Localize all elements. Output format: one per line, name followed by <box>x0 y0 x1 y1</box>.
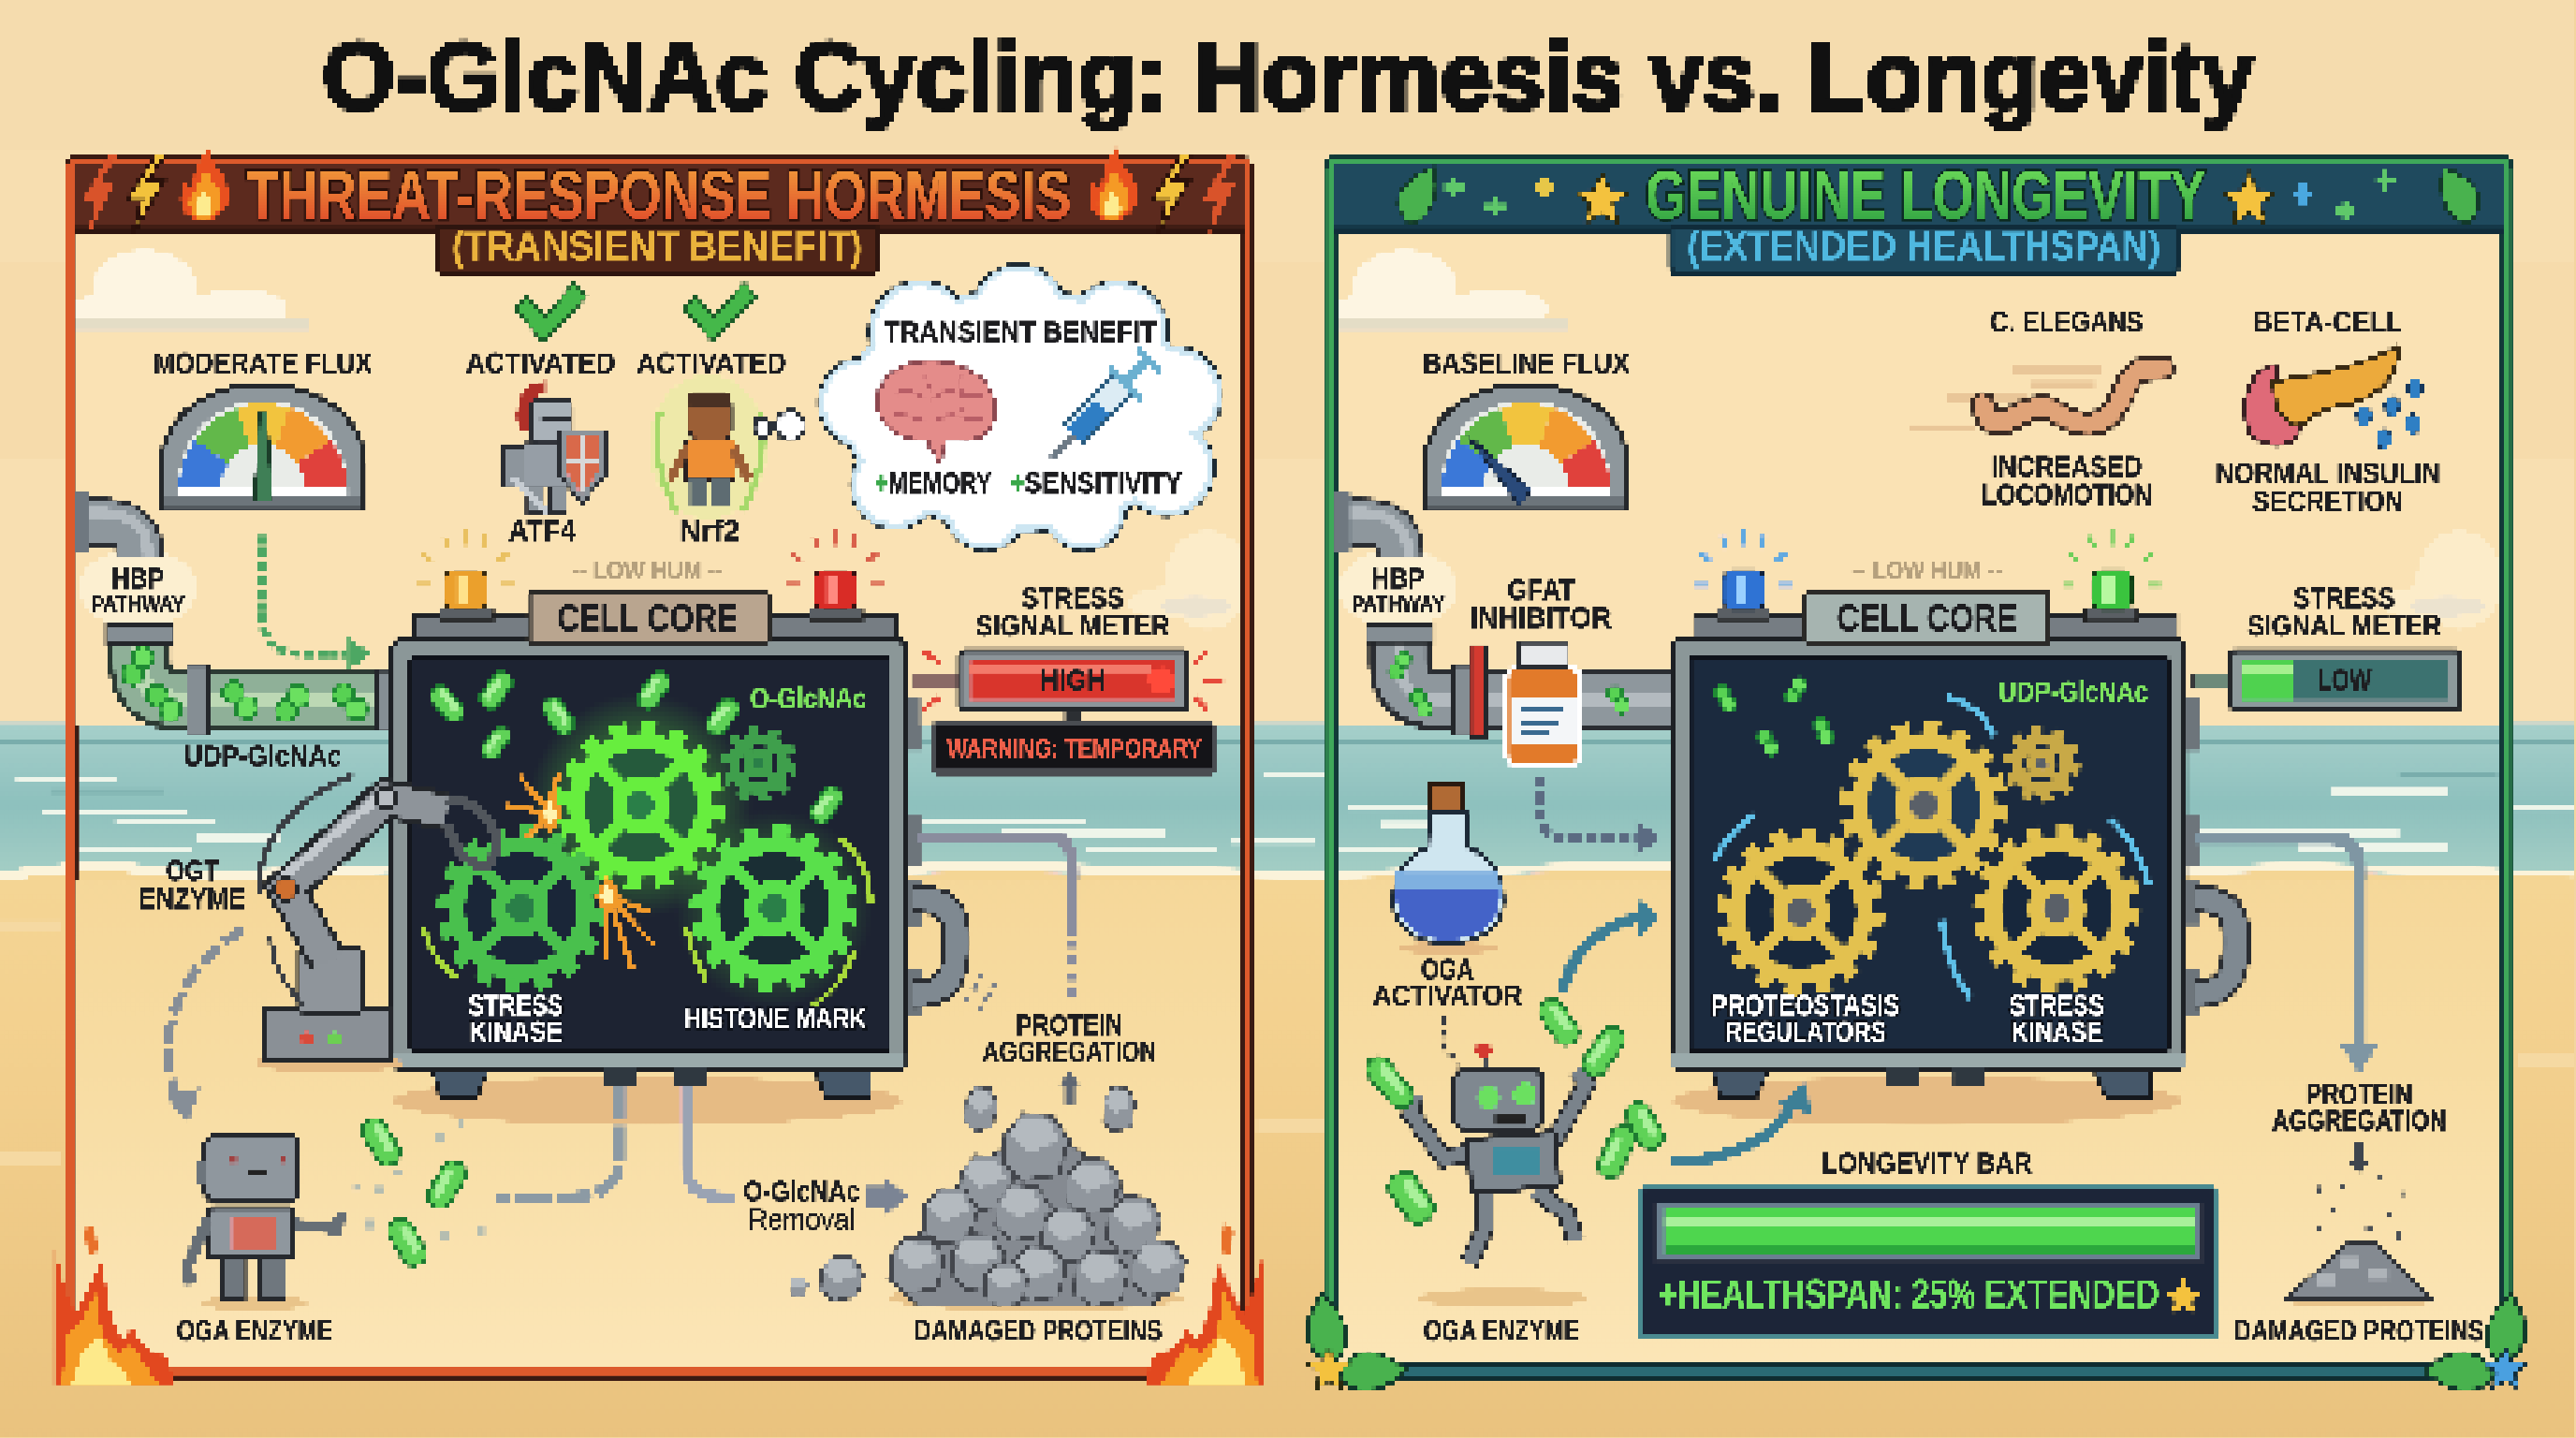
gear label: stress kinase <box>2009 989 2104 1049</box>
bubble label: sensitivity: +SENSITIVITY <box>1010 466 1182 500</box>
header title: threat-response: THREAT-RESPONSE HORMESIS <box>246 155 1071 233</box>
longevity value: +HEALTHSPAN: 25% EXTENDED <box>1659 1271 2159 1317</box>
pills <box>1361 995 1667 1228</box>
pipes: removal flow <box>496 1084 735 1197</box>
longevity bar <box>1640 1188 2217 1338</box>
motion marks <box>424 838 871 1005</box>
plaque: cell core <box>1806 592 2049 644</box>
label: stress signal meter: STRESS <box>1022 580 1123 614</box>
gear label: stress kinase <box>468 989 564 1049</box>
arrow: core to aggregation <box>916 838 1073 1003</box>
label: UDP-GlcNAc: UDP-GlcNAc <box>1998 674 2148 708</box>
warning text: WARNING: TEMPORARY <box>947 734 1202 763</box>
corner leaves and stars <box>1290 1293 2542 1404</box>
corner flames <box>54 1223 1265 1384</box>
panel: genuine longevity <box>1290 155 2542 1404</box>
label: OGT enzyme: ENZYME <box>139 882 245 916</box>
label: Nrf2: Nrf2 <box>680 513 740 547</box>
labels: genuine longevity panel <box>1352 155 2484 1347</box>
label: activated ATF4: ACTIVATED <box>466 345 615 379</box>
thought bubble <box>754 271 1216 544</box>
header title: genuine longevity: GENUINE LONGEVITY <box>1646 155 2205 233</box>
molecules in core <box>1712 675 1835 757</box>
header band <box>1334 165 2504 272</box>
meter value: HIGH <box>1040 663 1105 697</box>
header icons: fire and lightning <box>83 146 1237 233</box>
panel: threat-response hormesis <box>54 146 1265 1384</box>
label: HBP pathway: HBP <box>1372 561 1425 594</box>
label: protein aggregation <box>2272 1077 2446 1137</box>
panel background <box>69 230 1251 1367</box>
label: OGA enzyme: OGA ENZYME <box>177 1313 332 1347</box>
label: stress signal meter: STRESS <box>2293 580 2395 614</box>
gear label: stress kinase: STRESS <box>2009 989 2104 1022</box>
pipe: gray with inhibitor <box>1367 624 1671 736</box>
gears: longevity <box>1723 728 2134 990</box>
gear label: histone mark: HISTONE MARK <box>684 1002 867 1035</box>
checkmarks <box>514 283 755 342</box>
pipe: green glass with UDP-GlcNAc <box>107 624 394 735</box>
icon: knight ATF4 <box>503 388 607 513</box>
icon: pancreas <box>2245 346 2422 448</box>
label: HBP pathway: PATHWAY <box>91 592 184 616</box>
arrow: up to aggregation <box>1057 1073 1083 1104</box>
label: HBP pathway: PATHWAY <box>1352 592 1445 616</box>
label: normal insulin secretion: NORMAL INSULIN <box>2216 456 2440 490</box>
beacon: red <box>785 529 884 621</box>
panel frame <box>1331 161 2507 1373</box>
machine: cell core <box>392 616 956 1125</box>
label: protein aggregation: AGGREGATION <box>2272 1104 2446 1137</box>
arrow: flux to core <box>263 536 372 670</box>
label: increased locomotion <box>1982 449 2152 511</box>
blue motion arcs <box>1715 697 2149 999</box>
gear label: stress kinase: STRESS <box>468 989 564 1022</box>
label: damaged proteins: DAMAGED PROTEINS <box>915 1313 1163 1347</box>
icon: person Nrf2 <box>649 374 768 520</box>
gear label: stress kinase: KINASE <box>2011 1015 2103 1049</box>
label: protein aggregation: AGGREGATION <box>983 1034 1157 1068</box>
beacon: blue <box>1694 529 1793 621</box>
gears: stress response <box>444 694 872 1007</box>
label: increased locomotion: LOCOMOTION <box>1982 477 2152 511</box>
label: HBP pathway <box>91 561 184 616</box>
gauge: moderate flux <box>161 385 365 507</box>
label: OGT enzyme: OGT <box>166 854 218 888</box>
warning box <box>933 725 1214 772</box>
title: O-GlcNAc Cycling: Hormesis vs. Longevity <box>322 22 2254 132</box>
robot arm: OGT enzyme <box>255 775 496 1073</box>
vibration marks <box>966 970 996 1012</box>
label: low hum: -- LOW HUM -- <box>1852 556 2002 584</box>
label: activated Nrf2: ACTIVATED <box>637 345 786 379</box>
label: OGA activator <box>1372 952 1522 1012</box>
gear label: stress kinase: KINASE <box>469 1015 563 1049</box>
gear label: proteostasis regulators: REGULATORS <box>1725 1015 1886 1049</box>
icon: brain <box>877 361 995 463</box>
label: UDP-GlcNAc: UDP-GlcNAc <box>184 739 342 772</box>
label: stress signal meter: SIGNAL METER <box>976 609 1170 642</box>
pills and debris <box>353 1114 485 1269</box>
pipe: HBP gray elbow <box>1336 493 1408 555</box>
small pile: damaged proteins <box>2284 1175 2435 1308</box>
gauge: baseline flux <box>1425 385 1628 507</box>
label: C. elegans: C. ELEGANS <box>1990 305 2144 339</box>
label: GFAT inhibitor: GFAT <box>1507 573 1574 607</box>
label: protein aggregation <box>983 1008 1157 1068</box>
beacon: amber <box>416 529 514 621</box>
panel artwork: threat-response <box>54 146 1265 1384</box>
label: baseline flux: BASELINE FLUX <box>1423 345 1630 379</box>
label: HBP pathway: HBP <box>111 561 165 594</box>
labels: threat-response panel <box>91 155 1202 1347</box>
label: longevity bar: LONGEVITY BAR <box>1822 1146 2032 1180</box>
sparks <box>506 772 654 970</box>
label: normal insulin secretion <box>2216 456 2440 518</box>
icon: OGA activator flask <box>1393 784 1503 955</box>
label: OGT enzyme <box>139 854 245 916</box>
rock pile: damaged proteins <box>789 1087 1186 1312</box>
label: cell core: CELL CORE <box>1837 596 2017 639</box>
plaque: cell core <box>529 592 768 644</box>
label: O-GlcNAc removal: Removal <box>748 1202 856 1236</box>
label: O-GlcNAc removal <box>743 1174 860 1236</box>
label: O-GlcNAc removal: O-GlcNAc <box>743 1174 860 1208</box>
arrow: down to debris <box>2346 1144 2372 1175</box>
label: increased locomotion: INCREASED <box>1991 449 2143 483</box>
label: OGA activator: OGA <box>1421 952 1473 986</box>
label: GFAT inhibitor <box>1471 573 1612 634</box>
subtitle: transient benefit: (TRANSIENT BENEFIT) <box>452 223 862 269</box>
label: OGA enzyme: OGA ENZYME <box>1424 1313 1580 1347</box>
bottom bar <box>1355 1364 2482 1379</box>
label: GFAT inhibitor: INHIBITOR <box>1471 600 1612 634</box>
header icons: stars and leaves <box>1398 168 2479 224</box>
icon: GFAT inhibitor bottle <box>1506 642 1580 766</box>
bubble label: memory: +MEMORY <box>875 466 991 500</box>
header band <box>74 165 1244 272</box>
icon: syringe <box>1034 341 1167 474</box>
meter value: LOW <box>2318 663 2372 697</box>
pipe: HBP gray elbow <box>76 493 148 555</box>
label: low hum: -- LOW HUM -- <box>572 556 723 584</box>
arrow: OGT to OGA <box>165 930 243 1123</box>
label: normal insulin secretion: SECRETION <box>2252 484 2404 518</box>
bubble heading: TRANSIENT BENEFIT <box>884 315 1157 348</box>
label: beta-cell: BETA-CELL <box>2253 305 2403 339</box>
gear label: proteostasis regulators <box>1711 989 1900 1049</box>
label: stress signal meter <box>976 580 1170 642</box>
robot: OGA enzyme dancing <box>1412 1042 1588 1308</box>
arrow: activator to core <box>1562 897 1660 992</box>
beacon: green <box>2062 529 2160 621</box>
label: protein aggregation: PROTEIN <box>1017 1008 1123 1042</box>
panel frame <box>70 161 1247 1373</box>
label: stress signal meter <box>2247 580 2441 642</box>
panel background <box>1334 230 2502 1367</box>
arrow: core to aggregation <box>2195 838 2378 1075</box>
molecules in core <box>427 668 846 827</box>
arrow: inhibitor to core <box>1541 775 1661 855</box>
arrow: robot to core <box>1673 1081 1810 1160</box>
arrow: O-GlcNAc removal <box>868 1175 907 1218</box>
label: damaged proteins: DAMAGED PROTEINS <box>2234 1313 2484 1347</box>
label: OGA activator: ACTIVATOR <box>1372 978 1522 1012</box>
label: ATF4: ATF4 <box>508 513 577 547</box>
panel artwork: genuine longevity <box>1290 161 2542 1404</box>
icon: C. elegans worm <box>1909 365 2162 431</box>
label: moderate flux: MODERATE FLUX <box>154 345 373 379</box>
gear label: proteostasis regulators: PROTEOSTASIS <box>1711 989 1900 1022</box>
subtitle: extended healthspan: (EXTENDED HEALTHSPAN) <box>1687 223 2160 269</box>
meter: stress signal low <box>2193 651 2459 710</box>
label: O-GlcNAc: O-GlcNAc <box>750 681 867 714</box>
label: HBP pathway <box>1352 561 1445 616</box>
label: stress signal meter: SIGNAL METER <box>2247 609 2441 642</box>
robot: OGA enzyme <box>187 1137 342 1312</box>
machine: cell core <box>1673 616 2236 1125</box>
meter: stress signal high <box>912 651 1224 725</box>
label: protein aggregation: PROTEIN <box>2305 1077 2412 1110</box>
label: cell core: CELL CORE <box>557 596 738 639</box>
dashed leader <box>1444 1016 1460 1064</box>
